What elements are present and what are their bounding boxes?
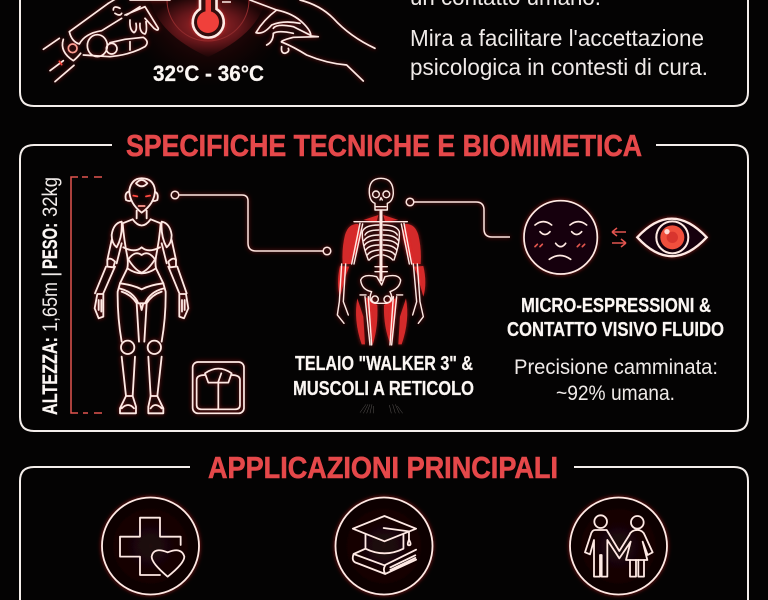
label: micro-espressioni: CONTATTO VISIVO FLUIDO bbox=[507, 319, 724, 341]
vertical label: altezza e peso: | bbox=[39, 272, 62, 277]
vertical label: altezza e peso: ALTEZZA: bbox=[39, 337, 62, 415]
connector: robot to skeleton bbox=[171, 191, 331, 255]
text block: precisione camminata bbox=[514, 356, 718, 405]
text block: intro description bbox=[410, 0, 708, 80]
label: telaio: MUSCOLI A RETICOLO bbox=[293, 378, 474, 400]
text block: intro description: Mira a facilitare l'accettazione bbox=[410, 25, 704, 51]
heading: applicazioni principali: APPLICAZIONI PRINCIPALI bbox=[208, 450, 558, 485]
connector: skeleton to face bbox=[406, 198, 510, 237]
icon: face bbox=[524, 201, 597, 274]
icon: exchange arrows bbox=[612, 228, 626, 247]
icon: healthcare bbox=[102, 498, 199, 594]
vertical label: altezza e peso bbox=[39, 177, 62, 415]
temperature label: 32°C - 36°C bbox=[153, 61, 264, 86]
bones bbox=[337, 178, 423, 345]
icon: people bbox=[570, 498, 667, 594]
text block: precisione camminata: Precisione camminata: bbox=[514, 356, 718, 379]
muscles bbox=[338, 215, 425, 345]
panel: specifiche frame bbox=[20, 145, 748, 431]
feet bbox=[360, 404, 403, 413]
label: telaio: TELAIO "WALKER 3" & bbox=[295, 353, 473, 375]
icon: weighing scale bbox=[193, 362, 244, 413]
thermometer badge bbox=[150, 0, 266, 57]
illustration: hands and thermometer bbox=[43, 0, 375, 87]
heading: specifiche tecniche: SPECIFICHE TECNICHE E BIOMIMETICA bbox=[126, 128, 642, 163]
panel: applicazioni frame bbox=[20, 467, 748, 600]
icon: robot hand bbox=[43, 0, 170, 82]
label: telaio bbox=[293, 353, 474, 400]
panel: intro frame bbox=[20, 0, 748, 106]
label: micro-espressioni: MICRO-ESPRESSIONI & bbox=[521, 295, 711, 317]
text block: intro description: psicologica in contesti di cura. bbox=[410, 54, 708, 80]
hips and legs bbox=[118, 283, 166, 342]
halo behind thermometer bbox=[126, 0, 290, 87]
figure: skeleton with muscles bbox=[337, 178, 425, 413]
vertical label: altezza e peso: 1,65m bbox=[39, 282, 62, 332]
vertical label: altezza e peso: 32kg bbox=[39, 177, 62, 217]
figure: humanoid robot bbox=[95, 178, 188, 413]
icon: eye bbox=[637, 219, 707, 256]
arms bbox=[112, 222, 172, 247]
head bbox=[129, 178, 155, 213]
torso bbox=[123, 219, 161, 268]
icon: human hand bbox=[250, 0, 375, 81]
label: micro-espressioni bbox=[507, 295, 724, 341]
text block: precisione camminata: ~92% umana. bbox=[556, 382, 675, 405]
height bracket bbox=[71, 177, 102, 413]
icon: education bbox=[336, 498, 432, 594]
vertical label: altezza e peso: PESO: bbox=[39, 223, 62, 269]
icon: thermometer bbox=[193, 0, 231, 38]
